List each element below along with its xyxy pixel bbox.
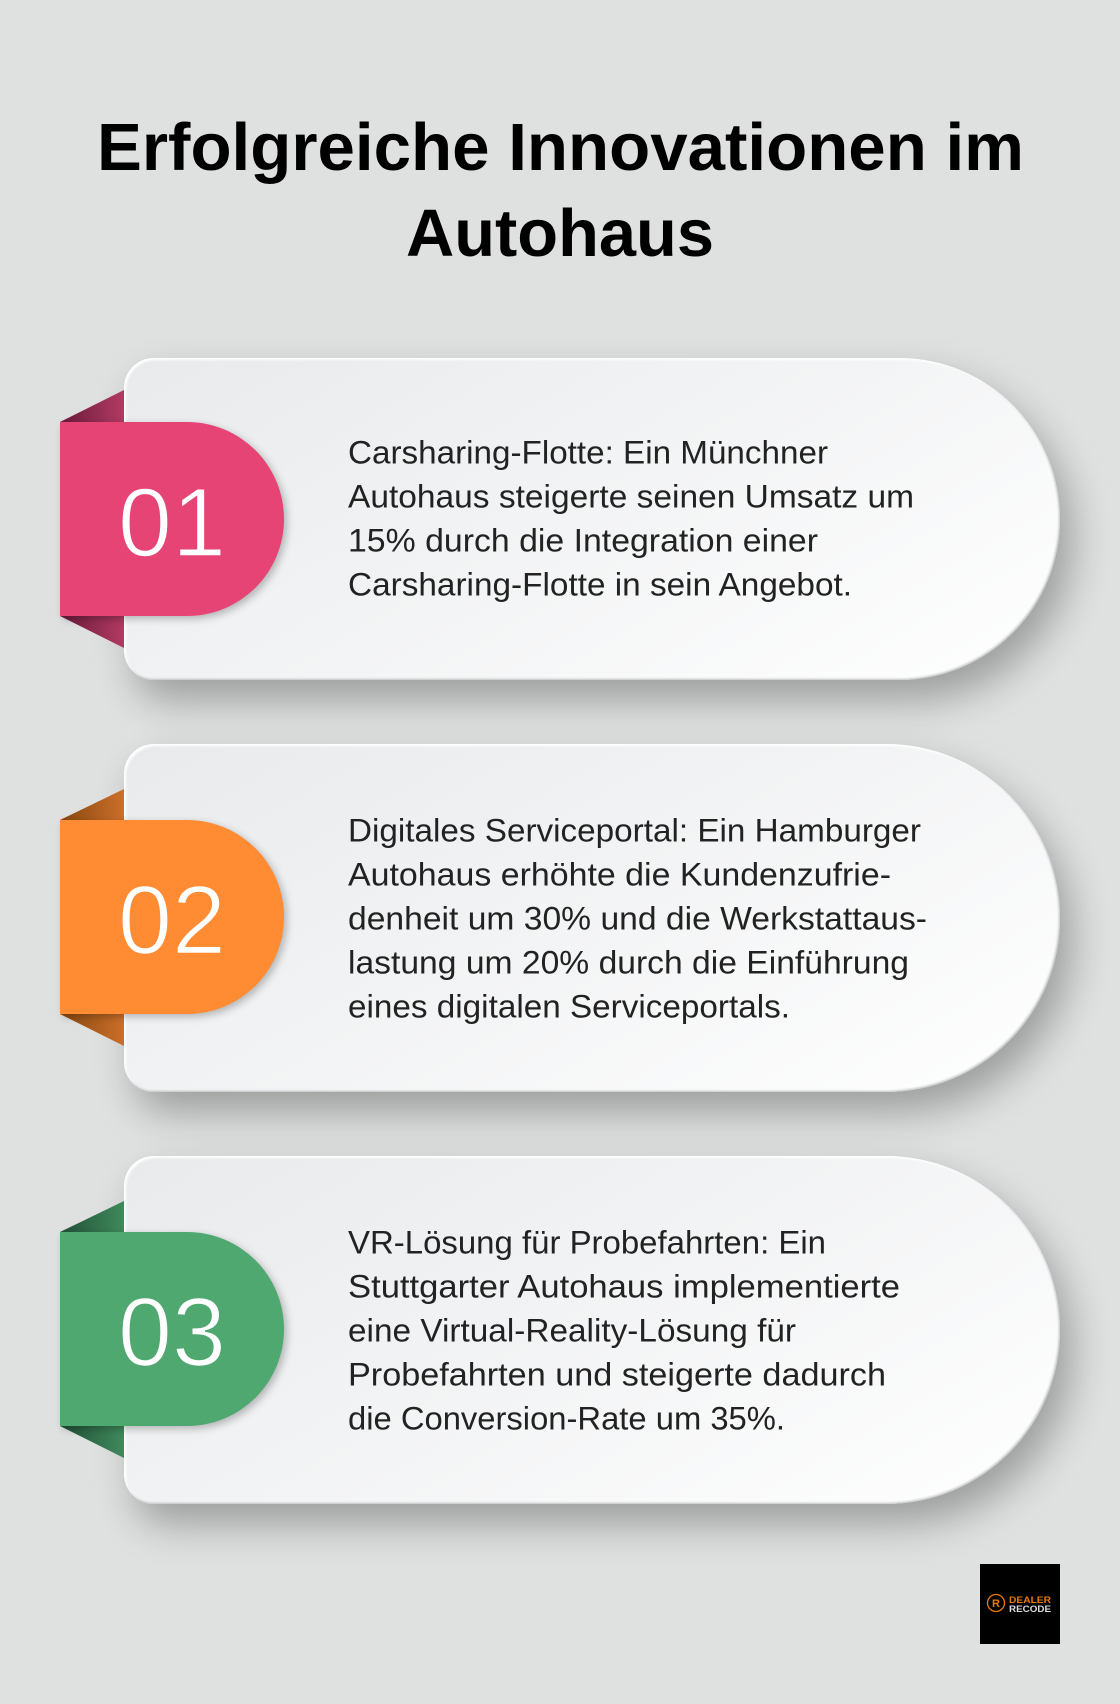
text block 3: eine Virtual-Reality-Lösung für	[348, 1312, 796, 1348]
ribbon fold 2	[60, 789, 124, 1046]
title: Erfolgreiche Innovationen im	[97, 110, 1024, 185]
number 01: 01	[118, 468, 226, 577]
number 03: 03	[118, 1278, 226, 1386]
text block 2: denheit um 30% und die Werkstattaus-	[348, 900, 927, 936]
text block 2: Digitales Serviceportal: Ein Hamburger	[348, 813, 921, 849]
text block 3: Probefahrten und steigerte dadurch	[348, 1356, 886, 1392]
number tab 03	[60, 1232, 284, 1426]
card 1 background	[124, 358, 1060, 680]
logo: Dealer Recode	[980, 1564, 1060, 1644]
panel: step 1	[59, 356, 1093, 722]
text block 3	[348, 1224, 900, 1436]
card 2 background	[124, 744, 1060, 1092]
ribbon fold 1	[60, 390, 124, 648]
number tab 02	[60, 820, 284, 1014]
text block 2: eines digitalen Serviceportals.	[348, 988, 790, 1024]
title: Autohaus	[406, 196, 714, 271]
text block 1	[348, 434, 914, 602]
logo: Dealer Recode: DEALER	[1009, 1595, 1051, 1606]
text block 2: Autohaus erhöhte die Kundenzufrie-	[348, 857, 891, 893]
panel: step 2	[59, 742, 1093, 1134]
panel: step 3	[59, 1154, 1093, 1546]
number tab 01	[60, 422, 284, 616]
text block 2	[348, 813, 927, 1024]
title	[97, 110, 1024, 271]
ribbon fold 3	[60, 1201, 124, 1458]
text block 1: Carsharing-Flotte: Ein Münchner	[348, 434, 828, 470]
text block 3: Stuttgarter Autohaus implementierte	[348, 1268, 900, 1304]
text block 2: lastung um 20% durch die Einführung	[348, 944, 909, 980]
logo: Dealer Recode: RECODE	[1009, 1604, 1051, 1615]
card 3 background	[124, 1156, 1060, 1504]
text block 1: Carsharing-Flotte in sein Angebot.	[348, 566, 852, 602]
text block 1: 15% durch die Integration einer	[348, 522, 818, 558]
number 02: 02	[118, 866, 226, 974]
logo: Dealer Recode: R	[992, 1598, 1000, 1610]
text block 3: VR-Lösung für Probefahrten: Ein	[348, 1224, 826, 1260]
text block 3: die Conversion-Rate um 35%.	[348, 1400, 785, 1436]
text block 1: Autohaus steigerte seinen Umsatz um	[348, 478, 914, 514]
